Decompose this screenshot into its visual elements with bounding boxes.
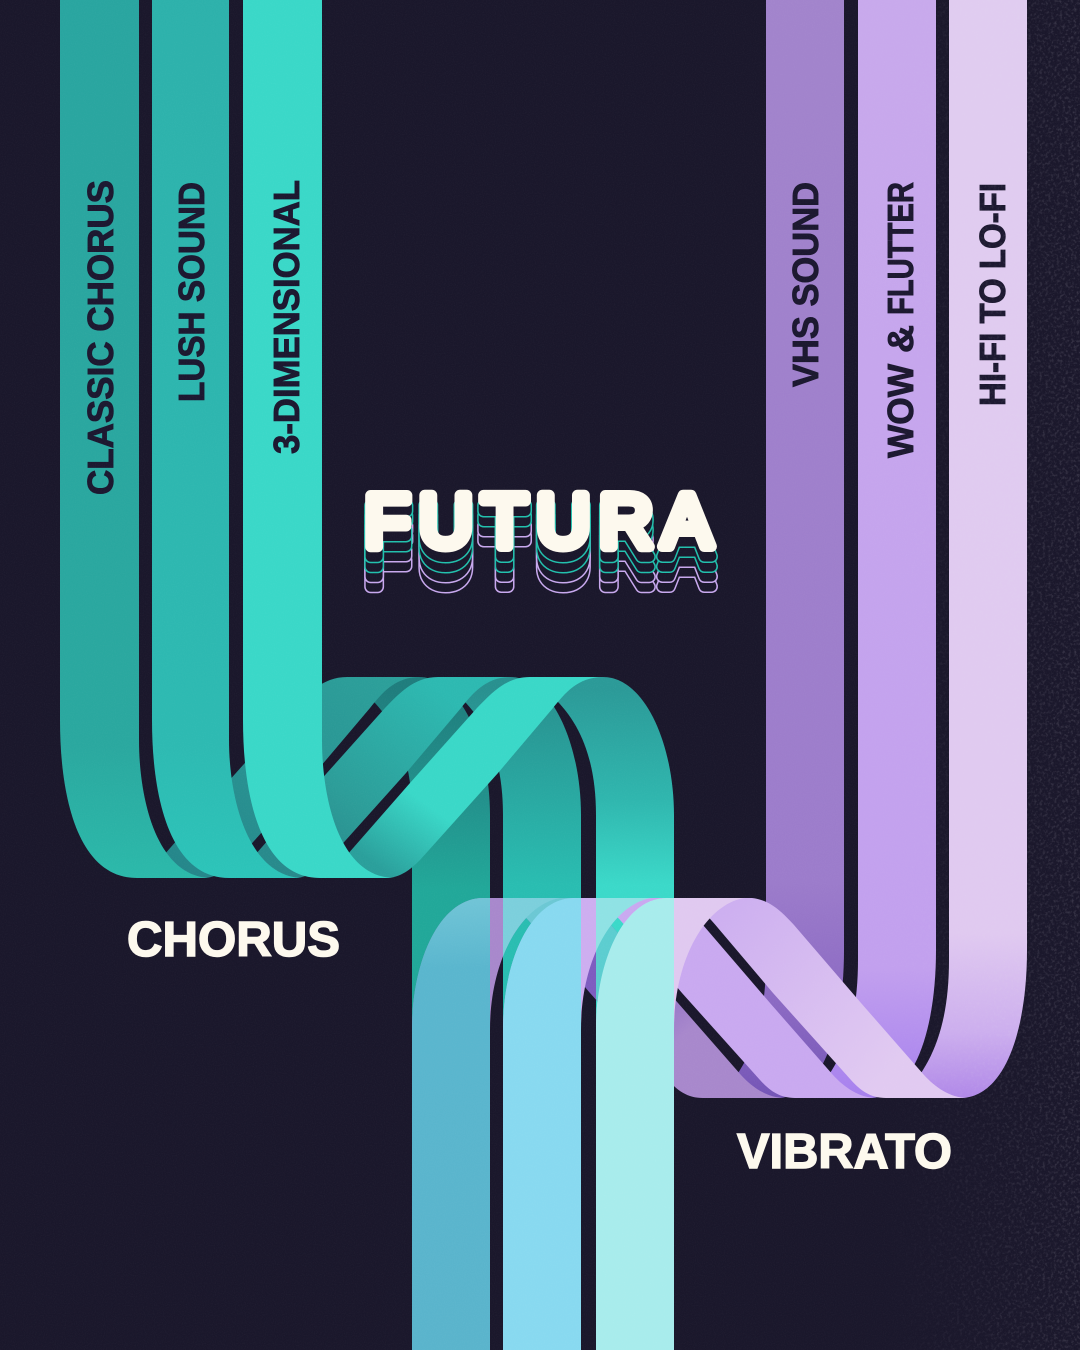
teal ribbons: descending back sections (369, 677, 674, 1350)
logo: futura with stacked echo outlines: FUTURA (365, 510, 712, 592)
teal ribbons: vertical bands with diagonal folds (60, 0, 603, 878)
pale overlap: middle lower column (503, 898, 581, 1350)
pale overlap: right lower column (596, 898, 674, 1350)
logo: futura with stacked echo outlines: FUTURA (365, 490, 712, 572)
logo: futura with stacked echo outlines: FUTURA (365, 510, 712, 592)
label: wow and flutter: FLUTTER (880, 182, 921, 315)
label: hi-fi to lo-fi: HI-FI TO LO-FI (972, 183, 1013, 406)
label: vhs sound: VHS SOUND (785, 182, 826, 387)
label: 3-dimensional: 3-DIMENSIONAL (266, 180, 307, 454)
purple ribbons: descending back sections (412, 898, 744, 1350)
heading: vibrato: VIBRATO (737, 1125, 952, 1179)
label: lush sound: LUSH SOUND (171, 182, 212, 402)
logo: futura with stacked echo outlines: FUTURA (365, 480, 712, 562)
purple ribbons: vertical bands (717, 0, 1027, 1098)
logo: futura with stacked echo outlines: FUTURA (365, 500, 712, 582)
logo: futura with stacked echo outlines: FUTURA (365, 500, 712, 582)
label: wow and flutter (880, 182, 921, 458)
label: wow and flutter: WOW (880, 364, 921, 458)
logo: futura with stacked echo outlines: FUTURA (365, 520, 712, 602)
logo: futura with stacked echo outlines: FUTURA (365, 490, 712, 572)
logo: futura with stacked echo outlines: FUTURA (365, 520, 712, 602)
logo: futura with stacked echo outlines (365, 480, 712, 602)
ribbon labels: vibrato features (785, 182, 1013, 458)
label: wow and flutter: & (880, 325, 921, 353)
heading: chorus: CHORUS (127, 913, 340, 967)
purple ribbons: diagonal folds (485, 898, 968, 1098)
pale overlap: left lower column (412, 898, 490, 1350)
label: classic chorus: CLASSIC CHORUS (80, 180, 121, 495)
ribbon labels: chorus features (80, 180, 307, 495)
